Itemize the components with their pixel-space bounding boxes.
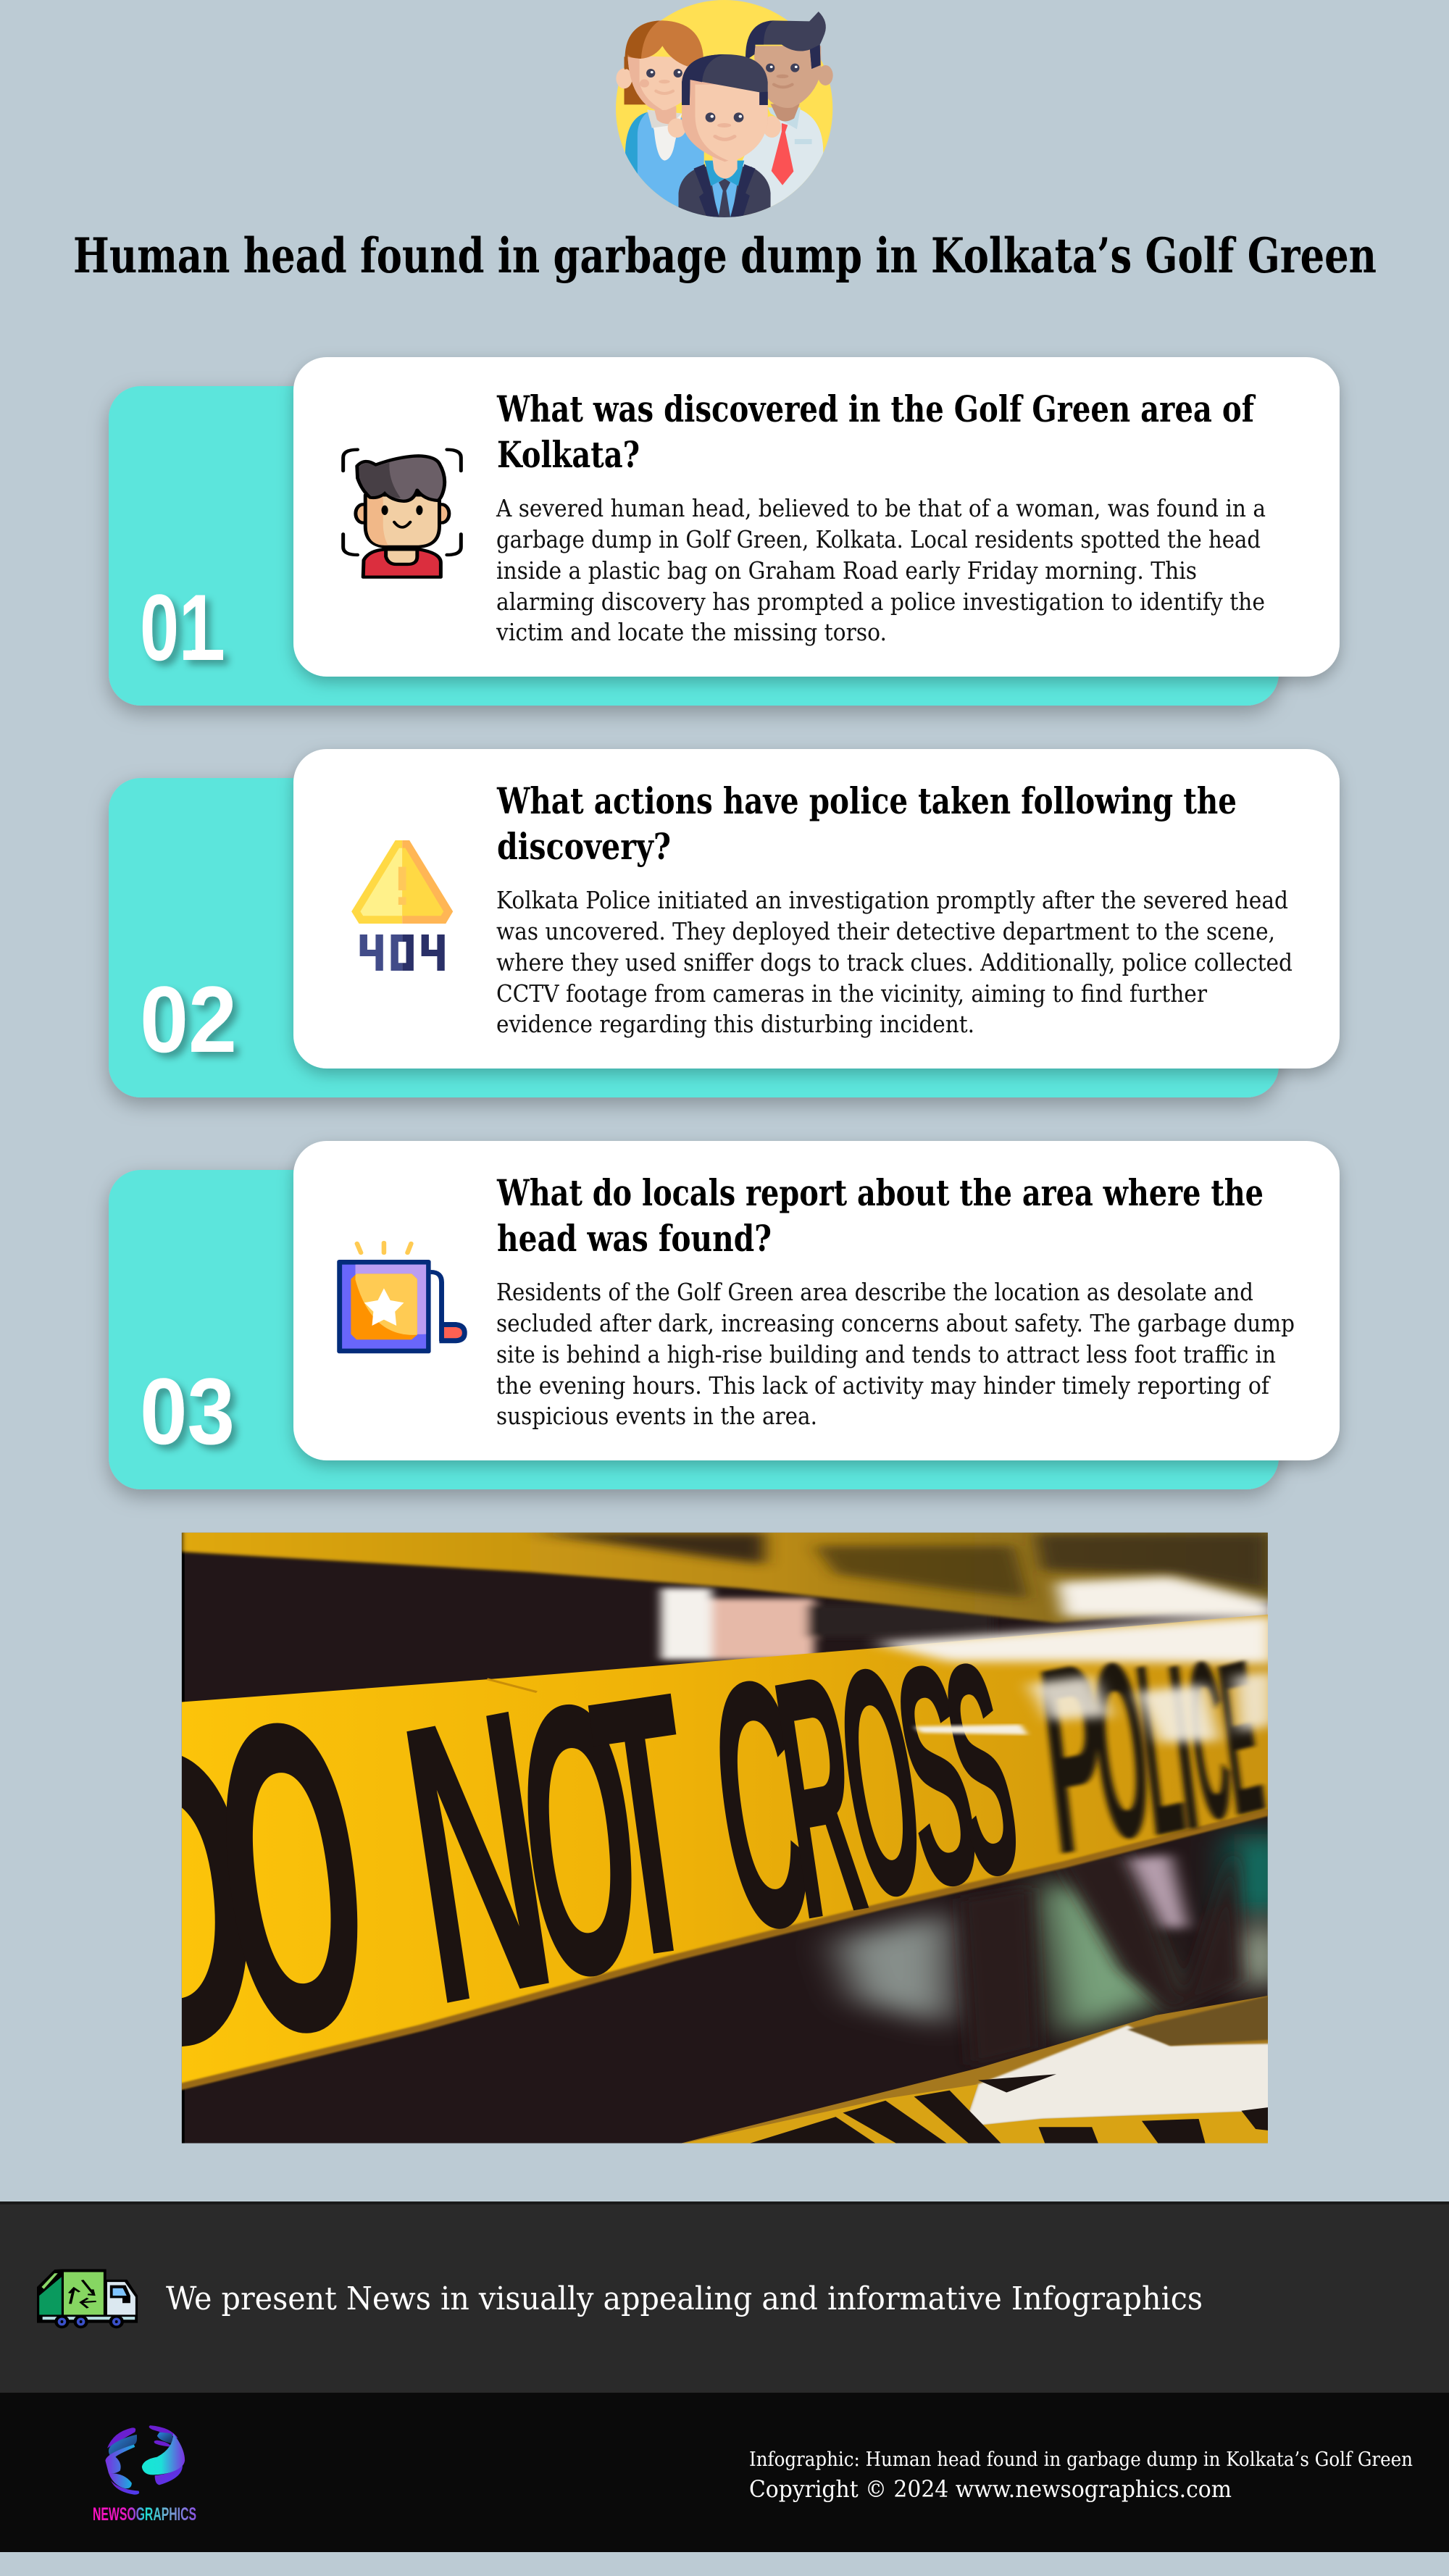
top tape — [182, 1529, 1274, 1623]
tape lettering: C — [693, 1603, 830, 2006]
copyright line: Copyright © 2024 www.newsographics.com — [749, 2475, 1232, 2503]
tape lettering: O — [503, 1621, 657, 2061]
tape lettering: O — [193, 1626, 391, 2130]
footer band: logo and credits — [0, 2393, 1449, 2552]
logo: Newsographics: NEWSOGRAPHICS — [93, 2504, 196, 2525]
body text 02: evidence regarding this disturbing incident. — [496, 1010, 974, 1038]
white card 02 — [293, 749, 1340, 1069]
tape lettering: N — [383, 1625, 573, 2089]
heading 01: Kolkata? — [497, 433, 640, 476]
heading 02 — [496, 779, 1237, 868]
tape lettering: R — [758, 1601, 882, 1992]
photo: police tape: O — [1080, 1607, 1162, 1896]
panel: card 03 — [109, 1141, 1340, 1489]
heading 02: What actions have police taken following the — [496, 779, 1237, 822]
heading 03: What do locals report about the area where the — [496, 1171, 1264, 1214]
teal backing 02 — [109, 778, 1279, 1097]
panel: card 01 — [109, 357, 1340, 706]
body text 03: Residents of the Golf Green area describe the location as desolate and — [496, 1278, 1253, 1306]
heading 03 — [496, 1171, 1264, 1260]
footer band: tagline — [0, 2201, 1449, 2393]
blurred background patches — [836, 1834, 1284, 2038]
heading 01 — [496, 388, 1256, 476]
photo: police tape — [181, 1533, 1268, 2144]
body text 01: A severed human head, believed to be that of a woman, was found in a — [496, 494, 1266, 522]
body text 01 — [496, 494, 1266, 646]
body text 03 — [496, 1278, 1295, 1430]
body text 02: CCTV footage from cameras in the vicinity, aiming to find further — [496, 979, 1207, 1008]
body text 03: suspicious events in the area. — [496, 1402, 817, 1430]
number 01: 01 — [140, 574, 218, 680]
white card 03 — [293, 1141, 1340, 1460]
body text 02 — [496, 886, 1293, 1038]
tape lettering: O — [819, 1596, 943, 1967]
body text 02: where they used sniffer dogs to track clues. Additionally, police collected — [496, 948, 1293, 977]
white glare band across tape top — [872, 1615, 1274, 1663]
body text 02: was uncovered. They deployed their detective department to the scene, — [496, 917, 1275, 945]
panel: card 02 — [109, 749, 1340, 1097]
icon: garbage truck — [37, 2269, 138, 2328]
tape lettering: T — [576, 1615, 717, 2037]
heading 03: head was found? — [497, 1217, 772, 1260]
body text 02: Kolkata Police initiated an investigation promptly after the severed head — [496, 886, 1288, 914]
photo: police tape: I — [1158, 1613, 1208, 1881]
white post and pink wall — [661, 1589, 993, 1660]
logo: Newsographics — [93, 2425, 196, 2525]
body text 01: garbage dump in Golf Green, Kolkata. Local residents spotted the head — [496, 525, 1261, 553]
photo: police tape: E — [1208, 1614, 1274, 1862]
tape lettering: S — [877, 1596, 997, 1955]
heading 02: discovery? — [497, 825, 671, 868]
body text 01: inside a plastic bag on Graham Road early Friday morning. This — [496, 556, 1197, 585]
body text 03: secluded after dark, increasing concerns about safety. The garbage dump — [496, 1309, 1295, 1337]
photo: police tape: L — [1127, 1610, 1194, 1889]
heading 01: What was discovered in the Golf Green area of — [496, 388, 1256, 430]
number 03: 03 — [140, 1358, 235, 1464]
tagline text: We present News in visually appealing and informative Infographics — [166, 2280, 1203, 2317]
bottom tape — [665, 1995, 1274, 2147]
white card 01 — [293, 357, 1340, 677]
tape lettering: D — [70, 1649, 280, 2145]
icon: three people in yellow circle — [616, 0, 833, 217]
icon: 404 warning — [351, 840, 453, 971]
glare — [914, 1725, 1028, 1735]
number 02: 02 — [140, 966, 237, 1072]
body text 03: the evening hours. This lack of activity may hinder timely reporting of — [496, 1371, 1271, 1400]
teal backing 03 — [109, 1170, 1279, 1489]
icon: star card device — [337, 1243, 467, 1353]
tape lettering: S — [925, 1597, 1037, 1944]
body text 01: victim and locate the missing torso. — [496, 618, 887, 646]
body text 01: alarming discovery has prompted a police investigation to identify the — [496, 587, 1265, 616]
main tape — [174, 1614, 1274, 2091]
photo: police tape: C — [1177, 1610, 1242, 1870]
icon: face scan — [343, 450, 461, 577]
tape lettering — [182, 1663, 1016, 2047]
body text 03: site is behind a high-rise building and tends to attract less foot traffic in — [496, 1340, 1276, 1368]
photo: police tape: P — [1030, 1605, 1119, 1911]
teal backing 01 — [109, 386, 1279, 706]
